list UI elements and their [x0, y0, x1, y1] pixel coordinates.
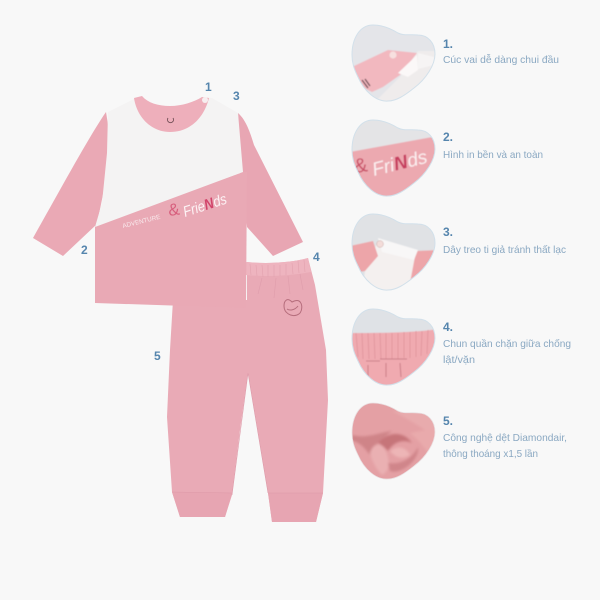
shoulder button [202, 97, 208, 103]
feature 3 text [443, 225, 566, 256]
callout numbers on garment [81, 80, 320, 363]
feature 5 text [443, 414, 567, 460]
waist folds [258, 274, 303, 298]
feature 4 text: Chun quần chặn giữa chống [443, 338, 571, 350]
print: friends: FrieNds [181, 191, 229, 221]
left sleeve [33, 112, 112, 256]
callout numbers on garment: 2 [81, 243, 88, 257]
print: ampersand: & [167, 199, 181, 220]
callout numbers on garment: 3 [233, 89, 240, 103]
feature 5 text: thông thoáng x1,5 lần [443, 448, 538, 460]
feature 4 text: 4. [443, 320, 453, 334]
feature 2 text [443, 130, 543, 161]
right sleeve [238, 113, 303, 256]
feature 5 text: Công nghệ dệt Diamondair, [443, 432, 567, 444]
pants logo [284, 300, 302, 316]
heart 2: print [350, 118, 438, 200]
feature 4 text [443, 320, 571, 366]
infographic canvas [33, 24, 570, 522]
feature 3 text: Dây treo ti giả tránh thất lạc [443, 244, 566, 256]
feature 4 text: lật/vặn [443, 354, 475, 366]
white panel [95, 96, 243, 227]
heart 3: pacifier strap [350, 212, 438, 294]
shirt [33, 96, 303, 308]
feature 1 text [443, 37, 559, 66]
feature 5 text: 5. [443, 414, 453, 428]
callout numbers on garment: 4 [313, 250, 320, 264]
heart 2: print: FriNds [370, 147, 430, 181]
heart 1: shoulder button [350, 23, 438, 105]
callout numbers on garment: 5 [154, 349, 161, 363]
print: adventure: ADVENTURE [122, 214, 161, 230]
right cuff [268, 493, 323, 522]
feature 1 text: 1. [443, 37, 453, 51]
pants [167, 258, 328, 522]
feature 2 text: 2. [443, 130, 453, 144]
heart 4: waistband [350, 307, 438, 389]
feature 2 text: Hình in bền và an toàn [443, 149, 543, 161]
shirt body [95, 172, 247, 308]
neck label [168, 118, 174, 123]
heart 5: fabric [352, 402, 436, 480]
waistband [246, 258, 311, 276]
left cuff [172, 492, 232, 517]
feature 3 text: 3. [443, 225, 453, 239]
heart 2: print: & [353, 154, 370, 178]
collar [134, 96, 209, 132]
callout numbers on garment: 1 [205, 80, 212, 94]
feature 1 text: Cúc vai dễ dàng chui đầu [443, 53, 559, 66]
